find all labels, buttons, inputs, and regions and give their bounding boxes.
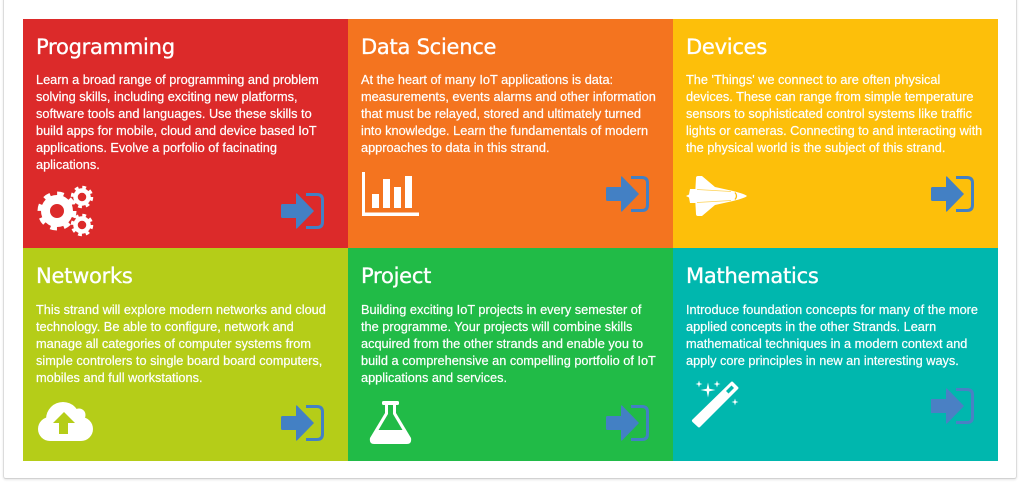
heading: data science: Data Science — [361, 35, 496, 59]
text: networks description: technology. Be able to configure, network and — [36, 319, 294, 334]
text: mathematics description: Introduce foundation concepts for many of the more — [686, 302, 978, 317]
text: devices description: the physical world is the subject of this strand. — [686, 140, 945, 155]
text: data science description: approaches to data in this strand. — [361, 140, 550, 155]
text: devices description: The 'Things' we connect to are often physical — [686, 72, 940, 87]
text: programming description: software tools and languages. Use these skills to — [36, 106, 312, 121]
text: mathematics description: mathematical techniques in a modern context and — [686, 336, 967, 351]
panel: networks — [23, 248, 348, 461]
text: project description: build a comprehensive an compelling portfolio of IoT — [361, 353, 656, 368]
text: devices description: sensors to sophisticated control systems like traffic — [686, 106, 972, 121]
arrow: enter — [281, 405, 324, 441]
arrow: enter — [931, 388, 974, 424]
arrow: enter — [606, 176, 649, 212]
text: programming description: build apps for mobile, cloud and device based IoT — [36, 123, 317, 138]
panel: data science — [348, 19, 673, 248]
text: project description: Building exciting IoT projects in every semester of — [361, 302, 641, 317]
text: programming description: aplications. — [36, 157, 100, 172]
icon: space shuttle — [686, 176, 747, 216]
text: data science description: that must be relayed, stored and ultimately turned — [361, 106, 641, 121]
heading: mathematics: Mathematics — [686, 264, 819, 288]
arrow: enter — [281, 193, 324, 229]
text: programming description: applications. Evolve a porfolio of facinating — [36, 140, 277, 155]
text: project description: the programme. Your projects will combine skills — [361, 319, 632, 334]
text: mathematics description: apply core principles in new an interesting ways. — [686, 353, 959, 368]
text: mathematics description — [686, 302, 978, 368]
text: devices description — [686, 72, 982, 155]
icon: magic wand — [692, 380, 738, 428]
icon: cloud upload — [38, 402, 93, 441]
panel: programming — [23, 19, 348, 248]
text: networks description: mobiles and full workstations. — [36, 370, 203, 385]
icon: gears — [38, 186, 94, 236]
panel: mathematics — [673, 248, 998, 461]
heading: devices: Devices — [686, 35, 767, 59]
arrow: enter — [606, 405, 649, 441]
text: programming description: Learn a broad range of programming and problem — [36, 72, 319, 87]
text: programming description: solving skills, including exciting new platforms, — [36, 89, 298, 104]
text: project description: acquired from the other strands and enable you to — [361, 336, 643, 351]
text: networks description: This strand will explore modern networks and cloud — [36, 302, 326, 317]
icon: flask — [370, 401, 412, 444]
text: networks description: simple controlers to single board board computers, — [36, 353, 322, 368]
text: devices description: lights or cameras. Connecting to and interacting with — [686, 123, 982, 138]
text: networks description — [36, 302, 326, 385]
text: programming description — [36, 72, 319, 172]
icon: bar chart — [362, 172, 419, 216]
text: data science description — [360, 72, 656, 155]
panel: devices — [673, 19, 998, 248]
panel: project — [348, 248, 673, 461]
text: project description — [361, 302, 656, 385]
arrow: enter — [931, 176, 974, 212]
heading: project: Project — [361, 264, 431, 288]
heading: networks: Networks — [36, 264, 133, 288]
text: data science description: measurements, events alarms and other information — [361, 89, 656, 104]
text: data science description: At the heart of many IoT applications is data: — [361, 72, 613, 87]
text: project description: applications and services. — [361, 370, 507, 385]
text: networks description: manage all categories of computer systems from — [36, 336, 311, 351]
text: mathematics description: applied concepts in the other Strands. Learn — [686, 319, 936, 334]
heading: programming: Programming — [36, 35, 175, 59]
text: devices description: devices. These can range from simple temperature — [686, 89, 974, 104]
text: data science description: into knowledge. Learn the fundamentals of modern — [361, 123, 648, 138]
